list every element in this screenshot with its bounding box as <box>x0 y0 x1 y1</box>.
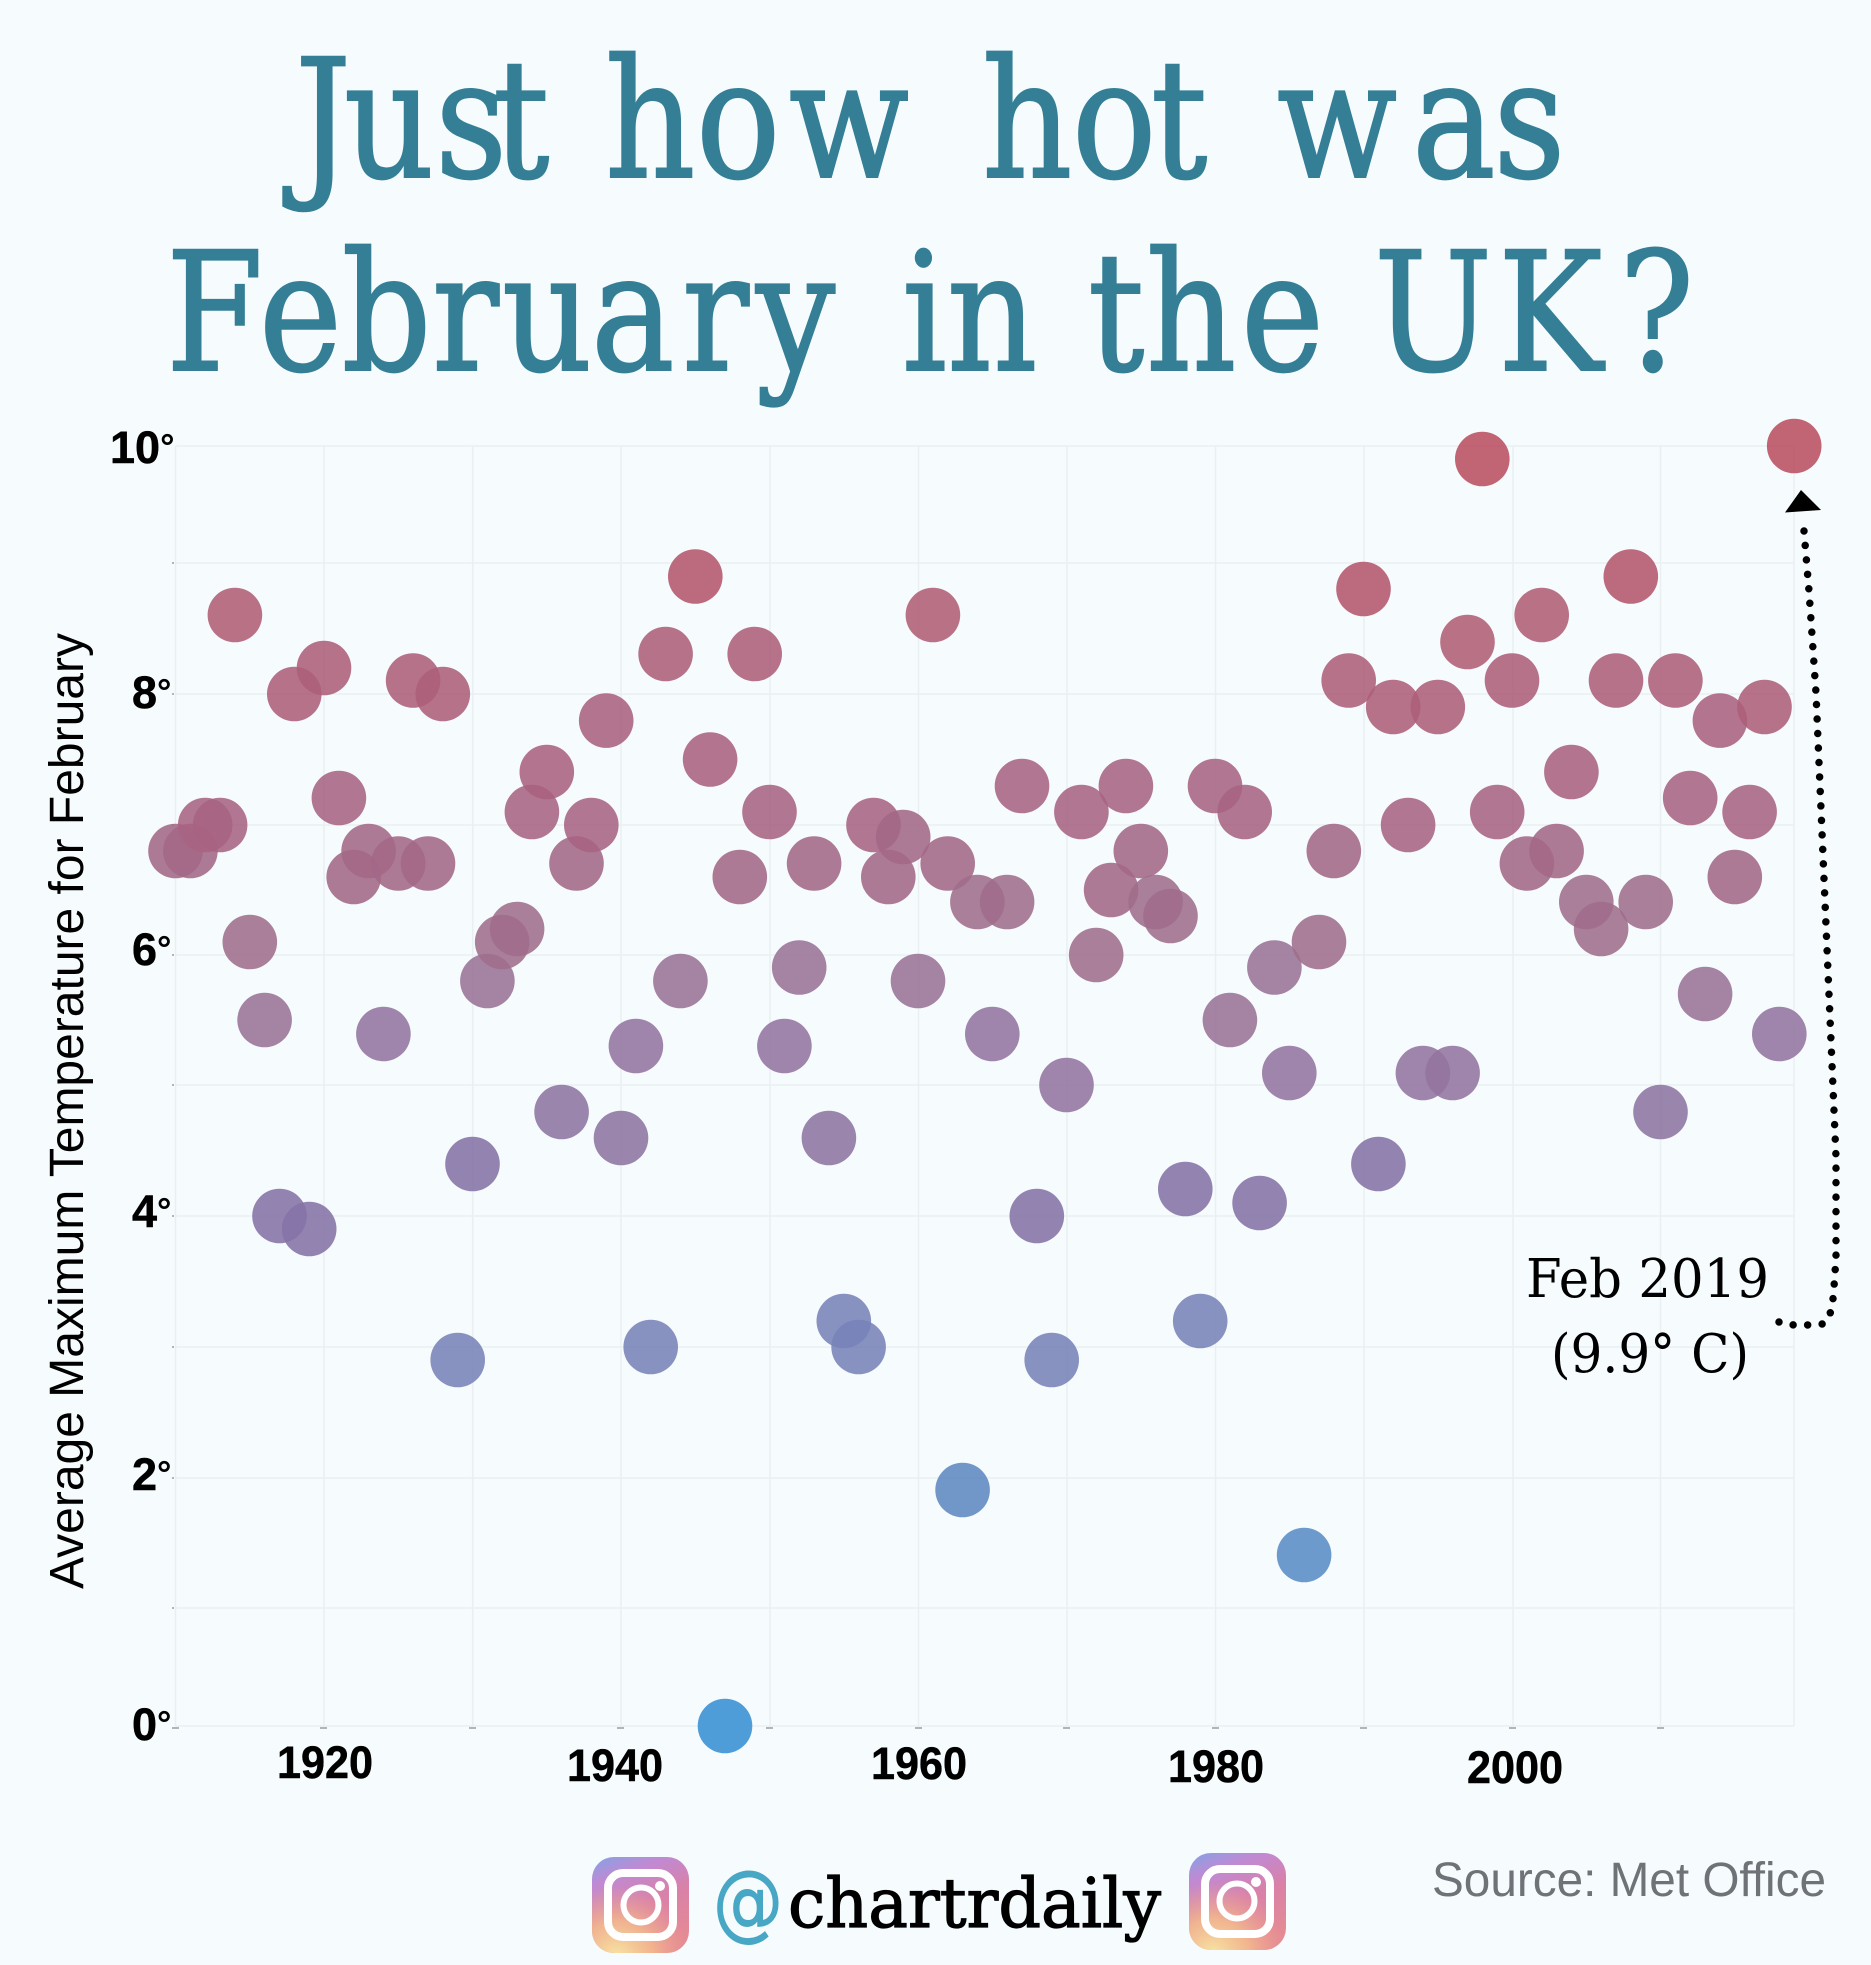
source note: Source: Met Office <box>1432 1854 1826 1907</box>
icon: instagram logo right <box>1189 1853 1286 1950</box>
x axis labels: 1940 <box>567 1740 663 1791</box>
x axis labels: 1920 <box>277 1737 373 1788</box>
y axis labels: 8 <box>132 667 157 718</box>
y axis labels: ° <box>157 928 171 969</box>
annotation text: Feb 2019: Feb 2019 <box>1526 1249 1769 1310</box>
y axis labels: ° <box>157 671 171 712</box>
handle: @chartrdaily: @ <box>713 1852 783 1950</box>
title line 2: February in the UK? <box>166 218 1694 410</box>
y axis labels: ° <box>157 1703 171 1744</box>
y axis labels: 6 <box>132 924 157 975</box>
x axis labels <box>277 1737 1563 1793</box>
annotation text: Feb 2019 <box>1526 1249 1769 1385</box>
y axis labels: 2 <box>132 1449 157 1500</box>
annotation text: Feb 2019: (9.9° C) <box>1551 1324 1749 1385</box>
data point: Feb 2019 <box>1767 419 1821 473</box>
title <box>166 25 1694 410</box>
y axis labels: 10 <box>110 422 160 473</box>
x axis labels: 2000 <box>1467 1742 1563 1793</box>
arrow: dotted line from annotation to Feb 2019 point <box>1779 490 1836 1325</box>
y axis title: Average Maximum Temperature for February <box>41 633 94 1589</box>
icon: instagram logo left <box>592 1857 689 1953</box>
y axis labels: 0 <box>132 1699 157 1750</box>
handle: @chartrdaily: chartrdaily <box>788 1865 1162 1944</box>
x axis labels: 1960 <box>871 1738 967 1789</box>
y axis labels: ° <box>160 426 174 467</box>
x axis labels: 1980 <box>1168 1741 1264 1792</box>
title line 1: Just how hot was <box>283 25 1565 217</box>
y axis labels: 4 <box>132 1186 157 1237</box>
y axis labels <box>110 422 174 1750</box>
scatter plot: February max temperature per year <box>148 419 1821 1753</box>
y axis labels: ° <box>157 1453 171 1494</box>
y axis labels: ° <box>157 1190 171 1231</box>
handle: @chartrdaily <box>713 1852 1162 1950</box>
